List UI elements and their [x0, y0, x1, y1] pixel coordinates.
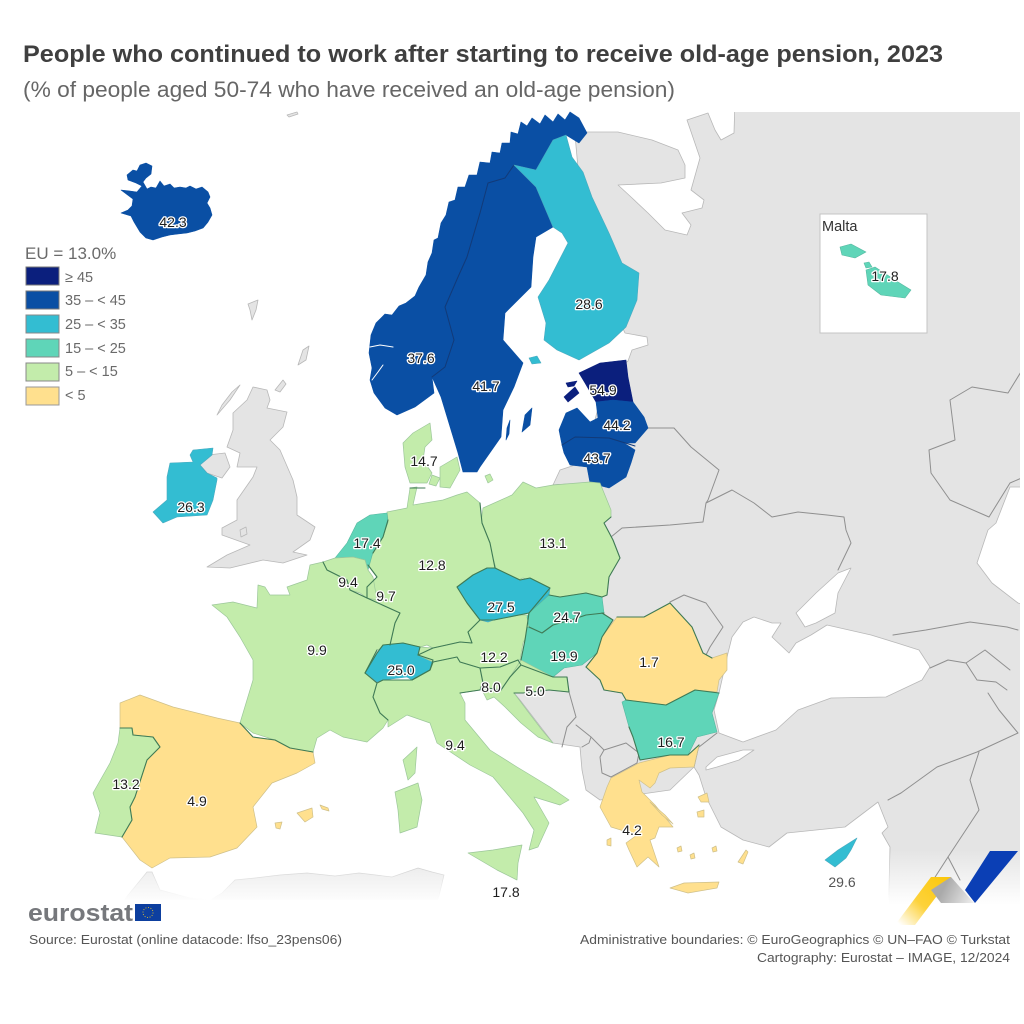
value labels: 13.1	[539, 535, 567, 551]
Corsica, Sardinia and Sicily	[395, 747, 522, 880]
legend: 5 – < 15	[65, 364, 118, 380]
value labels: 13.2	[112, 776, 140, 792]
value labels: 4.9	[187, 793, 207, 809]
Bulgaria	[622, 690, 719, 760]
value labels: 44.2	[603, 417, 631, 433]
Belgium and Luxembourg	[323, 557, 377, 600]
value labels: 24.7	[553, 609, 581, 625]
Norway-Sweden border	[432, 165, 514, 377]
value labels: 1.7	[639, 654, 659, 670]
value labels: 16.7	[657, 734, 685, 750]
value labels: 8.0	[481, 679, 501, 695]
Slovakia	[527, 593, 604, 633]
credits: Administrative boundaries: © EuroGeographics © UN–FAO © Turkstat	[580, 932, 1010, 947]
Czechia	[457, 568, 550, 622]
value labels: 19.9	[550, 648, 578, 664]
Switzerland	[365, 643, 433, 682]
Cyprus	[825, 838, 857, 867]
value labels: 41.7	[472, 378, 500, 394]
value labels: 25.0	[387, 662, 415, 678]
value labels: 17.4	[353, 535, 381, 551]
Gotland and Oland	[506, 408, 532, 440]
legend: < 5	[65, 388, 86, 404]
value labels: 37.6	[407, 350, 435, 366]
Norwegian fjords	[370, 345, 393, 380]
title: People who continued to work after starting to receive old-age pension, 2023	[23, 41, 943, 68]
Lithuania	[562, 437, 635, 488]
Austria	[418, 615, 530, 668]
Ireland	[153, 448, 217, 523]
Slovenia	[480, 660, 521, 690]
Aland	[529, 356, 541, 364]
value labels: 12.2	[480, 649, 508, 665]
Italy	[373, 657, 569, 850]
source note: Source: Eurostat (online datacode: lfso_23pens06)	[29, 932, 342, 947]
value labels: 28.6	[575, 296, 603, 312]
Iceland	[121, 163, 212, 240]
value labels: 5.0	[525, 683, 545, 699]
value labels: 9.4	[338, 574, 358, 590]
value labels: 9.4	[445, 737, 465, 753]
legend: 35 – < 45	[65, 293, 126, 309]
North Africa	[124, 868, 444, 900]
Greece	[600, 745, 748, 893]
Latvia-Lithuania border	[562, 437, 635, 446]
value labels: 26.3	[177, 499, 205, 515]
legend: ≥ 45	[65, 270, 93, 286]
United Kingdom	[200, 112, 315, 568]
value labels: 9.9	[307, 642, 327, 658]
Latvia	[559, 400, 648, 445]
value labels: 42.3	[159, 214, 187, 230]
credits: Cartography: Eurostat – IMAGE, 12/2024	[757, 950, 1010, 965]
Poland	[481, 482, 620, 597]
value labels: 43.7	[583, 450, 611, 466]
internal borders of non-covered countries	[553, 367, 1024, 885]
internal borders of covered countries	[120, 488, 719, 837]
Croatia	[481, 660, 569, 743]
Sweden	[432, 165, 553, 472]
Eurostat logo: eurostat	[28, 900, 133, 927]
legend: 25 – < 35	[65, 317, 126, 333]
subtitle: (% of people aged 50-74 who have received an old-age pension)	[23, 77, 675, 102]
value labels: 54.9	[589, 382, 617, 398]
Germany	[367, 487, 495, 648]
Spain	[120, 695, 315, 868]
corner logo mark	[895, 851, 1018, 925]
non-covered land: Russia, Eastern Europe, Turkey	[514, 100, 1024, 930]
value labels: 9.7	[376, 588, 396, 604]
Netherlands	[335, 513, 388, 570]
value labels: 14.7	[410, 453, 438, 469]
Denmark	[403, 423, 493, 488]
value labels: 17.8	[492, 884, 520, 900]
value labels: 12.8	[418, 557, 446, 573]
map of Europe	[93, 100, 1024, 930]
value labels: 27.5	[487, 599, 515, 615]
Hungary	[521, 613, 613, 677]
inset: Malta: 17.8	[871, 268, 899, 284]
Norway	[369, 112, 587, 415]
inset: Malta: Malta	[822, 219, 858, 235]
value labels	[112, 214, 856, 900]
Estonia	[564, 360, 633, 402]
Finland	[514, 135, 639, 360]
Portugal	[93, 728, 160, 837]
inset: Malta	[820, 214, 927, 333]
France	[212, 562, 400, 752]
credits	[580, 932, 1010, 965]
value labels: 29.6	[828, 874, 856, 890]
value labels: 4.2	[622, 822, 642, 838]
Romania	[586, 603, 727, 705]
Balearic Islands	[275, 805, 329, 829]
legend	[25, 244, 126, 405]
legend: EU = 13.0%	[25, 244, 116, 263]
legend: 15 – < 25	[65, 341, 126, 357]
